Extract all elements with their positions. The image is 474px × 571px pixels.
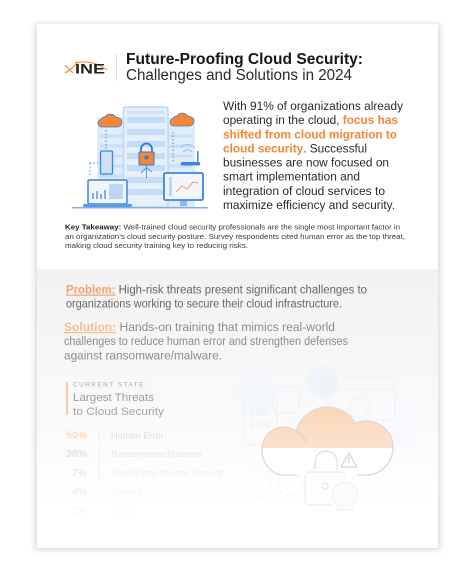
background threat icons [235,366,424,497]
section heading: largest threats: Largest Threats [73,392,154,404]
row: other: 2% [72,504,88,516]
row: ransomware: 38% [66,448,88,460]
right cloud [170,113,194,126]
intro paragraph: cloud security. Successful [223,142,367,156]
intro paragraph: With 91% of organizations already [223,99,404,113]
cloud upper half fill [262,408,392,448]
side server left [98,118,126,207]
wifi router [180,145,200,166]
row: staffing: Staffing [111,487,142,497]
threats table [66,430,224,516]
key takeaway [65,222,405,250]
side server right [166,118,194,207]
logo: INE [65,62,107,76]
monitor [164,173,203,206]
row: ransomware: Ransomware/Malware [111,449,202,459]
row: staffing: 4% [72,486,88,498]
intro paragraph: operating in the cloud, focus has [223,113,398,127]
laptop [83,180,132,207]
solution statement: Solution: Hands-on training that mimics real-world [64,320,335,334]
background threat icons: 1100 [250,420,271,429]
logo divider [116,54,117,81]
problem statement [66,282,367,310]
phone device [100,151,112,174]
intro paragraph: integration of cloud services to [223,184,385,198]
skull [332,482,358,510]
row: staffing [72,486,142,498]
central server tower [124,107,168,207]
solution statement [64,320,348,362]
row: human error [66,430,164,442]
left cloud [98,114,122,127]
title: Future-Proofing Cloud Security: [126,51,363,68]
intro paragraph: shifted from cloud migration to [223,128,397,142]
problem statement: organizations working to secure their cloud infrastructure. [66,296,342,310]
section heading: largest threats [66,382,164,418]
intro paragraph: businesses are now focused on [223,156,389,170]
cloud body [262,407,393,475]
row: third-party [72,467,224,479]
lower grey section [37,269,438,548]
page card [37,24,438,548]
key takeaway: an organization’s cloud security posture. Survey respondents cited human error as the top threat, [65,232,405,241]
cloud illustration [262,407,393,510]
title [126,51,363,84]
solution statement: challenges to reduce human error and strengthen defenses [64,334,348,348]
intro paragraph: smart implementation and [223,170,360,184]
key takeaway: making cloud security training key to reducing risks. [65,241,248,250]
ground line [72,207,208,208]
logo: INE: INE [75,62,105,76]
row: other [72,504,134,516]
row: third-party: 7% [72,467,88,479]
row: third-party: Third-Party Vendor Security [111,468,224,478]
intro paragraph: maximize efficiency and security. [223,198,395,212]
dotted connectors [90,130,173,177]
row: other: Other [111,506,134,516]
warning triangle [341,453,357,467]
section heading: largest threats: CURRENT STATE: [73,382,148,388]
row: ransomware [66,448,202,460]
cloud outline [262,407,393,475]
row: human error: Human Error [111,430,164,440]
solution statement: against ransomware/malware. [64,348,222,362]
problem statement: Problem: High-risk threats present significant challenges to [66,282,367,296]
key takeaway: Key Takeaway: Well-trained cloud security professionals are the single most important factor in [65,222,400,232]
background threat icons: 010 [250,408,266,417]
intro paragraph [223,99,404,212]
illustration: cloud data center [72,107,208,208]
row: human error: 50% [66,430,88,442]
padlock [139,144,154,178]
page card shadow [35,24,440,550]
title: Challenges and Solutions in 2024 [126,67,352,84]
section heading: largest threats: to Cloud Security [73,406,164,418]
padlock [315,451,337,470]
